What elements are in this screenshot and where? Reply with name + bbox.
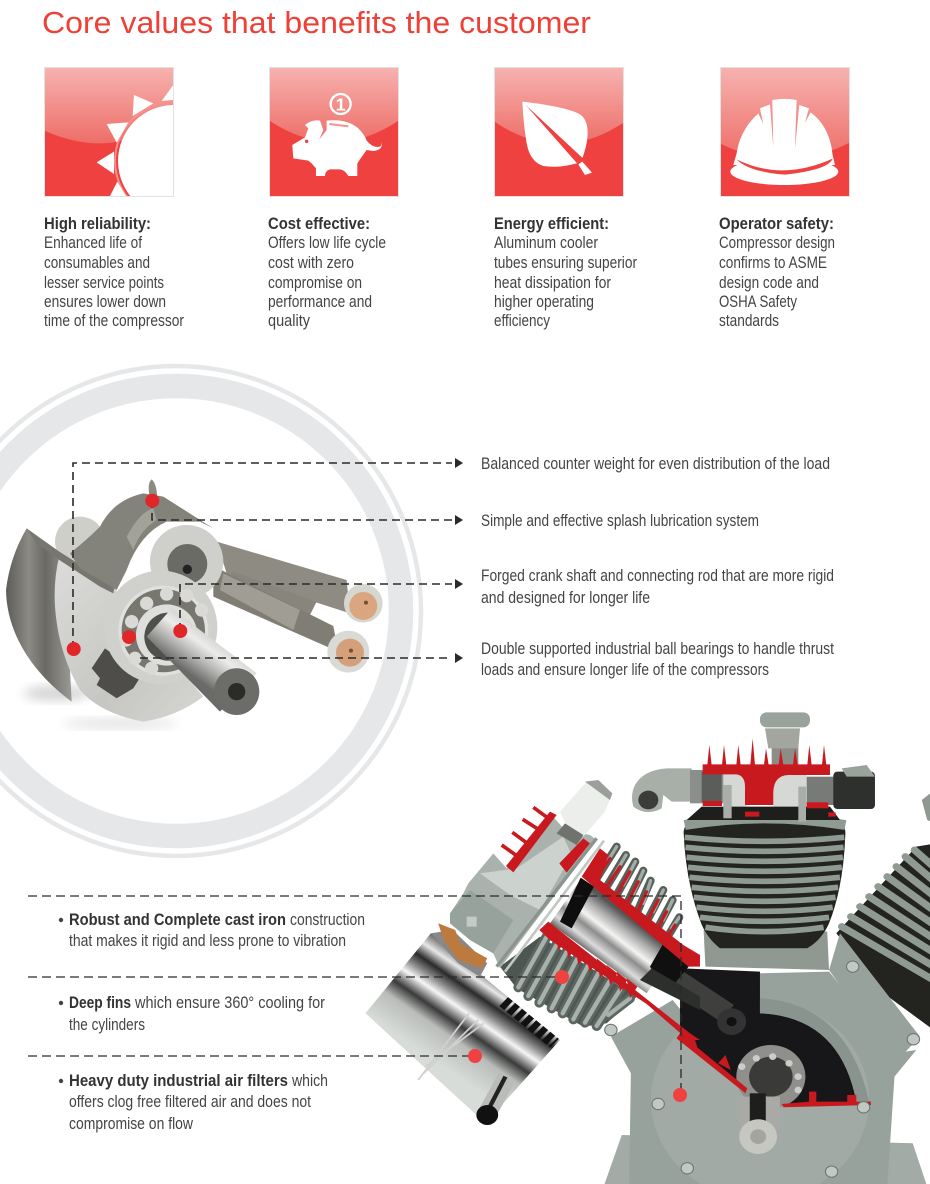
red marker dots on crankshaft [67,494,187,656]
text block: operator safety: Operator safety: [719,215,834,233]
black head plate [687,807,840,820]
text block: crankshaft callouts: Forged crank shaft and connecting rod that are more rigid [481,567,834,585]
text block: crankshaft callouts: loads and ensure longer life of the compressors [481,661,769,679]
upper fins [597,847,679,938]
bullet: cast iron [59,911,365,950]
text block: cost effective: Offers low life cycle [268,234,386,252]
head top cap and stem [760,712,810,764]
red marker dots on compressor [468,970,687,1102]
text block: high reliability: ensures lower down [44,293,166,311]
piston [550,878,700,1010]
bullet: deep fins [59,994,325,1034]
icon: cost effective piggy bank [270,68,398,196]
text block: crankshaft callouts: Simple and effective splash lubrication system [481,512,759,530]
text block: energy efficient: Aluminum cooler [494,234,598,252]
dashed leader lines: compressor callouts [28,896,681,1090]
left cylinder cutaway [450,780,700,1040]
text block: operator safety [719,215,835,330]
text block: energy efficient: tubes ensuring superior [494,254,637,272]
text block: crankshaft callouts: and designed for longer life [481,589,650,607]
ball bearing [104,571,217,684]
text block: cost effective [268,215,386,330]
dashed leader lines: crankshaft callouts [73,458,463,663]
icon: energy efficient leaf [494,68,624,196]
plate bolts [605,939,920,1177]
bullet: air filters: which [291,1072,328,1090]
text block: energy efficient: efficiency [494,312,551,330]
text block: operator safety: OSHA Safety [719,293,798,311]
text block: high reliability: time of the compressor [44,312,184,330]
central cylinder [684,815,845,970]
text block: high reliability [44,215,184,330]
text block: crankshaft callouts [481,455,834,679]
text block: cost effective: cost with zero [268,254,354,272]
flange rings [497,838,604,972]
right cylinder [836,790,930,1047]
bullet: cast iron: that makes it rigid and less prone to vibration [69,932,346,950]
text block: high reliability: Enhanced life of [44,234,142,252]
text block: high reliability: lesser service points [44,274,164,292]
bullet: air filters [59,1072,328,1133]
red strips along cylinder walls [539,848,700,1040]
icon: cost effective piggy bank: 1 [336,95,346,115]
text block: operator safety: standards [719,312,779,330]
bullet: cast iron: construction [290,911,365,929]
text block: cost effective: Cost effective: [268,215,370,233]
crankcase foot and body [604,933,927,1184]
icon: operator safety helmet [720,68,850,196]
bullet: air filters: Heavy duty industrial air filters [69,1072,288,1090]
bullet: air filters: compromise on flow [69,1115,193,1133]
bullet: deep fins: Deep fins [69,994,131,1012]
text block: compressor features [59,911,365,1133]
icon: high reliability sun [44,67,174,197]
panel: core values icons and text [44,68,850,330]
text block: cost effective: compromise on [268,274,362,292]
text block: cost effective: quality [268,312,311,330]
cylinder head, pipes and red cooling fins [632,712,875,822]
crank chamber [662,968,871,1154]
bullet: deep fins: which ensure 360° cooling for [134,994,325,1012]
studs [723,785,806,822]
text block: operator safety: Compressor design [719,234,835,252]
red section lines near crank [676,1033,747,1093]
bullet: air filters: offers clog free filtered air and does not [69,1093,311,1111]
text block: operator safety: confirms to ASME [719,254,827,272]
pipes [632,765,875,812]
title: Core values that benefits the customer [42,5,591,40]
text block: high reliability: consumables and [44,254,150,272]
text block: energy efficient: heat dissipation for [494,274,611,292]
text block: high reliability: High reliability: [44,215,151,233]
text block: energy efficient [494,215,637,330]
crankshaft and connecting rods photo [6,479,383,728]
text block: energy efficient: Energy efficient: [494,215,609,233]
text block: cost effective: performance and [268,293,372,311]
crank web and weight [6,479,223,722]
connecting rods [213,542,383,673]
red section [703,738,836,817]
text block: crankshaft callouts: Balanced counter weight for even distribution of the load [481,455,830,473]
text block: operator safety: design code and [719,274,819,292]
red head section with fins [502,807,590,873]
compressor cutaway photo [365,712,930,1184]
air filter [365,923,560,1125]
shaft [147,608,259,715]
decorative rings behind crankshaft [0,366,421,856]
head block [450,780,612,968]
bullet: cast iron: Robust and Complete cast iron [69,911,286,929]
text block: crankshaft callouts: Double supported industrial ball bearings to handle thrust [481,640,834,658]
lower fins [500,937,637,1027]
text block: energy efficient: higher operating [494,293,594,311]
bullet: deep fins: the cylinders [69,1016,145,1034]
